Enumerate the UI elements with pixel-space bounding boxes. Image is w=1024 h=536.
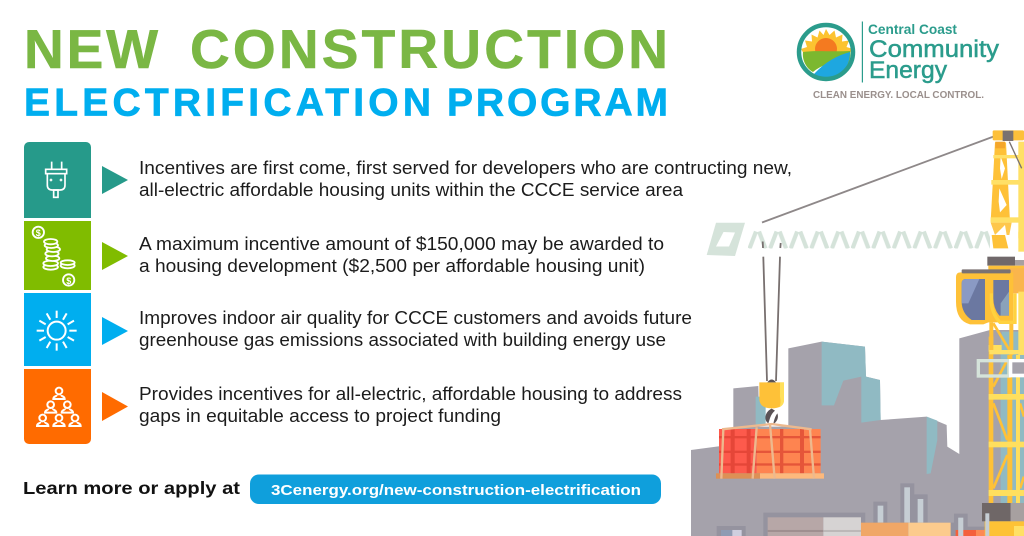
learn more label: Learn more or apply at [23,478,240,498]
subtitle: electrification program [24,82,668,124]
arrow [102,317,128,345]
tower crane lower mast [958,337,1024,536]
title: new construction: NEW [24,18,158,80]
row 2: coins [24,221,664,290]
text: maximum incentive: A maximum incentive amount of $150,000 may be awarded to [139,233,664,254]
crane cab [956,232,1024,355]
row 3: sun [24,293,692,366]
green icon tile with coins: $ [36,228,41,238]
logo wordmark: Central Coast [868,22,957,37]
row 4: people [24,369,682,444]
city skyline [691,330,1024,536]
teal icon tile with plug [24,142,91,218]
crane upper mast [991,130,1024,238]
text: air quality [139,307,692,350]
text: equitable access [139,383,682,426]
upper cable [762,136,995,222]
text: incentives first come [139,157,792,200]
text: maximum incentive: a housing development ($2,500 per affordable housing unit) [139,255,645,276]
logo: central coast community energy [797,22,999,101]
logo wordmark: Community [869,36,999,63]
blue icon tile with sun [24,293,91,366]
foreground buildings [717,483,994,536]
text: incentives first come: all-electric affordable housing units within the CCCE service area [139,179,684,200]
text: maximum incentive [139,233,664,276]
subtitle: electrification program: ELECTRIFICATION [24,82,431,124]
url button: 3Cenergy.org/new-construction-electrification [271,482,641,499]
row 1: plug [24,142,792,218]
green icon tile with coins: $ [66,276,71,286]
subtitle: electrification program: PROGRAM [447,82,668,124]
logo tagline: CLEAN ENERGY. LOCAL CONTROL. [813,90,984,101]
text: equitable access: gaps in equitable access to project funding [139,405,501,426]
logo wordmark [868,22,999,84]
arrow [102,242,128,270]
logo divider [862,22,863,82]
title: new construction: CONSTRUCTION [190,18,668,80]
lower cables [763,242,781,381]
arrow [102,392,128,421]
orange icon tile with people [24,369,91,444]
crane hook and crate [716,379,824,479]
jib arm [707,223,990,256]
text: air quality: Improves indoor air quality for CCCE customers and avoids future [139,307,692,328]
logo emblem [797,23,855,81]
illustration: construction site [691,130,1024,536]
text: equitable access: Provides incentives for all-electric, affordable housing to address [139,383,682,404]
green icon tile with coins [24,221,91,290]
url button [250,474,661,504]
text: incentives first come: Incentives are first come, first served for developers who are contructing new, [139,157,792,178]
logo wordmark: Energy [869,57,947,84]
text: air quality: greenhouse gas emissions associated with building energy use [139,329,666,350]
arrow [102,166,128,194]
